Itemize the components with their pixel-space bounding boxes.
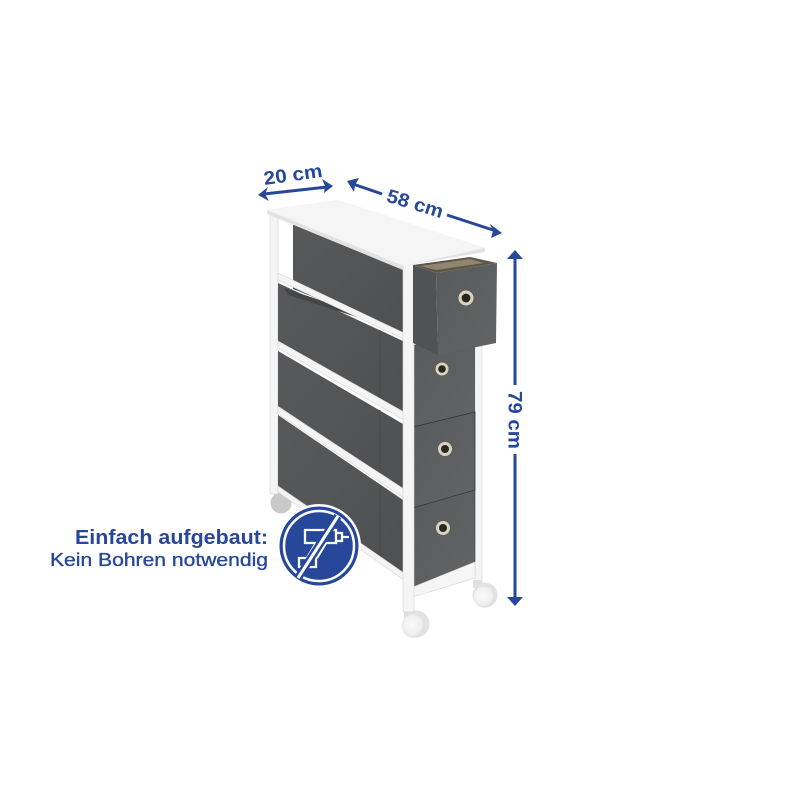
rear left post and rear wheel — [270, 214, 292, 514]
side rails — [278, 273, 404, 580]
dimension: width 20 cm: 20 cm — [262, 161, 324, 190]
dimension: length 58 cm — [347, 178, 502, 238]
icon: no drilling — [277, 504, 361, 588]
callout: no drilling text: Kein Bohren notwendig — [50, 549, 268, 570]
product: drawer cabinet — [267, 200, 498, 638]
callout: no drilling text — [50, 527, 268, 570]
dimension: width 20 cm — [258, 161, 333, 201]
drawer 3 — [413, 412, 475, 508]
dimension: height 79 cm — [504, 250, 524, 606]
right rear post — [475, 345, 482, 583]
drawer 4 — [413, 490, 475, 587]
pulled out drawer — [413, 257, 497, 355]
drawer 2 — [413, 336, 475, 427]
dimension: length 58 cm: 58 cm — [384, 186, 446, 223]
callout: no drilling text: Einfach aufgebaut: — [75, 527, 268, 549]
side fabric panels — [278, 224, 403, 573]
dimension: height 79 cm: 79 cm — [504, 391, 524, 449]
table top — [267, 200, 485, 270]
wheels — [402, 580, 498, 638]
front drawers — [413, 336, 475, 587]
front post and base rail — [403, 264, 475, 612]
